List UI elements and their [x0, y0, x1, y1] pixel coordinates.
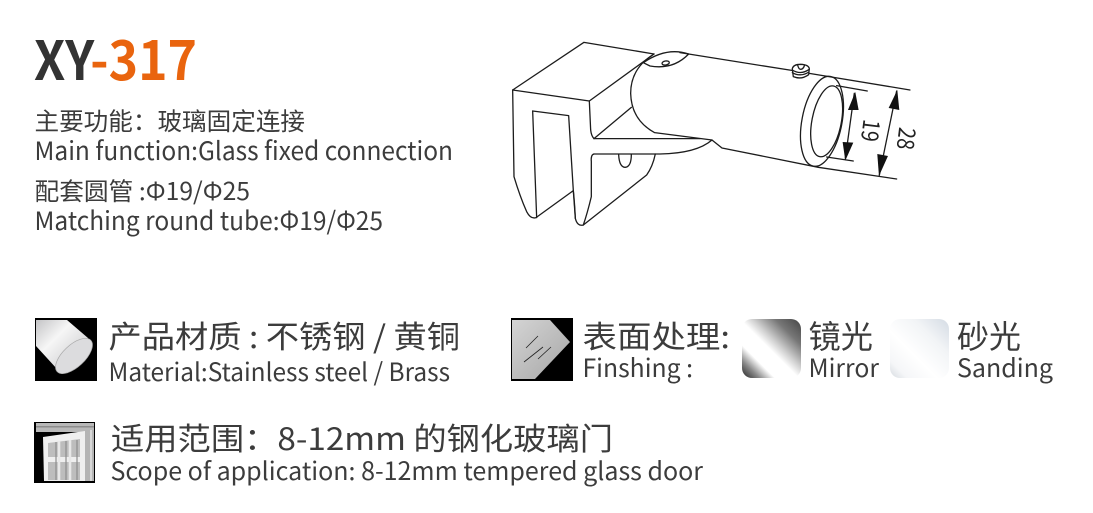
text block: finishing label	[582, 312, 730, 385]
text block: finishing label: 表面处理:	[582, 312, 730, 357]
text block: mirror: 镜光	[808, 312, 873, 358]
product line drawing with dimensions	[513, 42, 926, 225]
text block: mirror	[808, 312, 879, 385]
clamp body	[513, 42, 712, 225]
text block: matching round tube: Matching round tube:Φ19/Φ25	[34, 201, 383, 238]
text block: material: 产品材质 : 不锈钢 / 黄铜	[108, 312, 460, 357]
set screw	[792, 64, 809, 78]
text block: main function	[34, 103, 453, 168]
tube body	[631, 52, 910, 179]
dimension 28: 28	[890, 126, 926, 152]
title: XY-317	[34, 17, 197, 96]
dimension 19: 19	[854, 118, 890, 144]
text block: scope of application	[110, 414, 703, 488]
text block: scope of application: 适用范围：8-12mm 的钢化玻璃门	[111, 414, 613, 459]
icon: glass finishing	[511, 318, 573, 381]
text block: main function: 主要功能：玻璃固定连接	[34, 103, 305, 138]
icon: material cylinder	[35, 318, 98, 381]
dimension 28	[877, 90, 926, 176]
icon: door	[34, 422, 95, 483]
dimension 19	[827, 86, 890, 161]
text block: matching round tube: 配套圆管 :Φ19/Φ25	[34, 173, 250, 208]
text block: matching round tube	[34, 173, 383, 238]
text block: material: Material:Stainless steel / Brass	[108, 353, 450, 389]
text block: mirror: Mirror	[808, 349, 879, 385]
text block: main function: Main function:Glass fixed connection	[34, 131, 453, 168]
text block: material	[108, 312, 460, 389]
tube opening	[794, 73, 850, 170]
text block: sanding	[957, 312, 1053, 385]
swatch: mirror	[742, 319, 801, 378]
text block: finishing label: Finshing :	[582, 349, 693, 385]
text block: sanding: Sanding	[957, 349, 1053, 385]
swatch: sanding	[890, 319, 949, 378]
text block: sanding: 砂光	[957, 312, 1021, 358]
text block: scope of application: Scope of application: 8-12mm tempered glass door	[110, 452, 703, 488]
